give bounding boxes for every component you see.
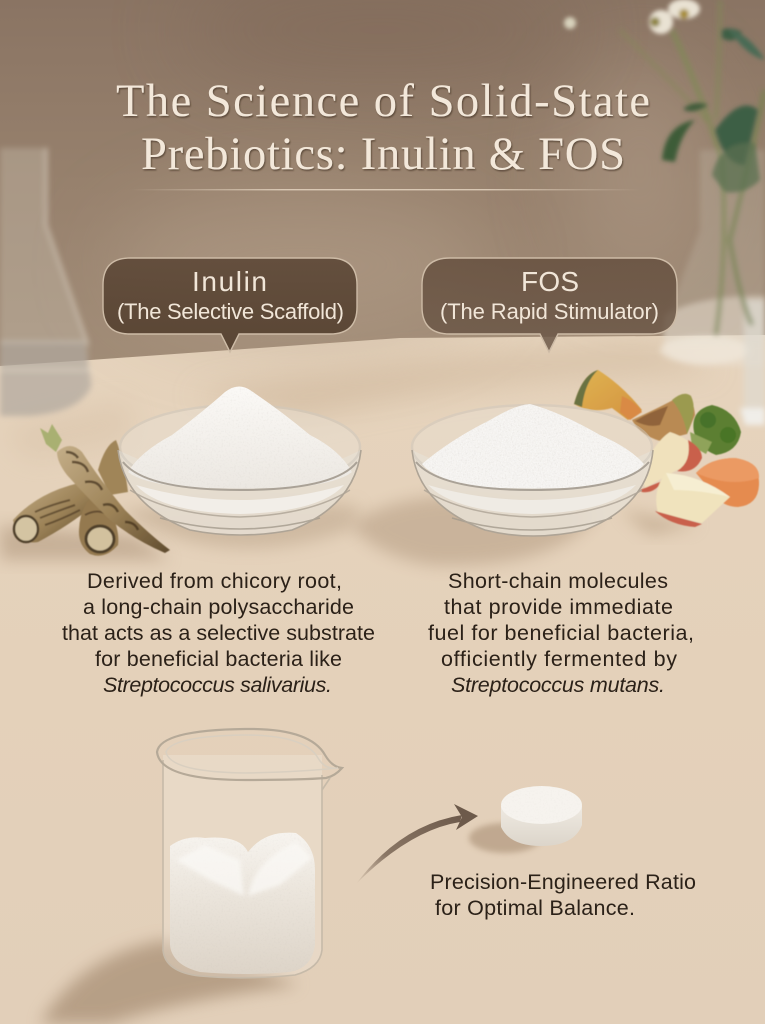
squash wedge bbox=[574, 370, 642, 420]
callout: FOS: FOS bbox=[521, 266, 579, 297]
table shadows bbox=[0, 345, 720, 1024]
broccoli bbox=[690, 405, 741, 455]
tablet bbox=[501, 786, 582, 846]
text: FOS description: that provide immediate bbox=[444, 595, 673, 619]
text: precision ratio caption bbox=[430, 870, 696, 920]
left root with cut end bbox=[13, 481, 94, 543]
text: FOS description: fuel for beneficial bacteria, bbox=[428, 621, 694, 645]
left blurred glass flask bbox=[0, 148, 92, 416]
brown root vegetable piece bbox=[632, 394, 695, 441]
text: precision ratio caption: Precision-Engineered Ratio bbox=[430, 870, 696, 894]
callout: Inulin: (The Selective Scaffold) bbox=[117, 299, 344, 324]
curved arrow bbox=[356, 804, 478, 884]
apple wedge front bbox=[655, 473, 730, 527]
callout: FOS bbox=[422, 258, 677, 352]
text: inulin description bbox=[62, 569, 375, 697]
text: inulin description: Derived from chicory root, bbox=[87, 569, 342, 593]
lower root with cut end bbox=[79, 495, 118, 556]
callout: FOS: (The Rapid Stimulator) bbox=[440, 299, 659, 324]
title divider bbox=[130, 189, 640, 190]
chicory roots bbox=[13, 424, 170, 556]
callout: Inulin: Inulin bbox=[192, 266, 267, 297]
text: inulin description: for beneficial bacteria like bbox=[95, 647, 342, 671]
callout: Inulin bbox=[103, 258, 357, 352]
vegetables and fruit bbox=[574, 370, 759, 527]
text: inulin description: a long-chain polysaccharide bbox=[83, 595, 354, 619]
FOS granules mound bbox=[422, 404, 644, 488]
text: inulin description: that acts as a selective substrate bbox=[62, 621, 375, 645]
rear root bbox=[98, 440, 128, 495]
title bbox=[116, 76, 650, 180]
front long root with leaf tuft bbox=[40, 424, 170, 553]
text: FOS description: Streptococcus mutans. bbox=[451, 673, 665, 697]
beaker powder bbox=[170, 833, 315, 974]
title: The Science of Solid-State bbox=[116, 76, 650, 127]
inulin bowl bbox=[118, 386, 361, 535]
apple wedge rear bbox=[640, 432, 702, 492]
FOS bowl bbox=[412, 404, 653, 536]
beaker with powder bbox=[157, 729, 342, 978]
carrot slice bbox=[696, 458, 759, 507]
text: precision ratio caption: for Optimal Balance. bbox=[435, 896, 635, 920]
inulin powder mound bbox=[128, 386, 352, 488]
text: FOS description bbox=[428, 569, 694, 697]
text: FOS description: Short-chain molecules bbox=[448, 569, 668, 593]
text: FOS description: officiently fermented by bbox=[441, 647, 677, 671]
text: inulin description: Streptococcus salivarius. bbox=[103, 673, 332, 697]
right blurred vase with flowers bbox=[564, 0, 765, 425]
title: Prebiotics: Inulin & FOS bbox=[141, 129, 625, 180]
